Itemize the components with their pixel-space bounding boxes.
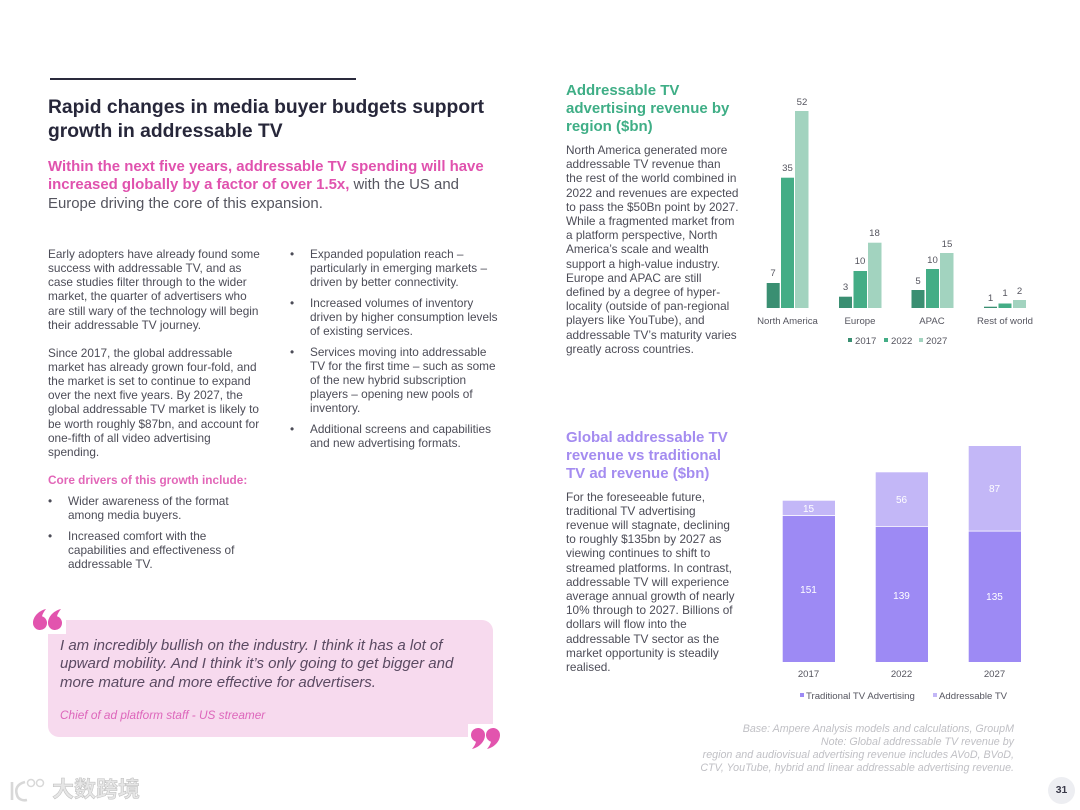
bullet list: left column: •	[48, 494, 52, 508]
stacked bar chart: addressable vs traditional	[782, 446, 1021, 702]
bullet list: right column: driven by better connectivity.	[310, 275, 459, 289]
icon: watermark mark	[10, 778, 44, 802]
bar chart: revenue by region: Rest of world	[977, 316, 1033, 327]
bullet list: left column: addressable TV.	[68, 557, 153, 571]
bullet list: right column: driven by higher consumption levels	[310, 310, 498, 324]
stacked bar chart: addressable vs traditional: 15	[803, 504, 814, 515]
text block: region commentary: support a high-value industry.	[566, 257, 720, 271]
bullet list: left column: Increased comfort with the	[68, 529, 206, 543]
title: growth in addressable TV	[48, 121, 283, 142]
text block: global commentary: streamed platforms. In contrast,	[566, 560, 732, 574]
heading: addressable TV by region: Addressable TV	[566, 82, 679, 99]
quote text: I am incredibly bullish on the industry. I think it has a lot of	[60, 637, 442, 654]
bullet list: right column: Increased volumes of inventory	[310, 296, 473, 310]
bar chart: revenue by region: 2	[1017, 286, 1022, 297]
quote text: more mature and more effective for advertisers.	[60, 674, 376, 691]
bar chart: revenue by region: 1	[1002, 288, 1008, 299]
watermark logo	[10, 777, 140, 802]
stacked bar chart: addressable vs traditional: 151	[800, 585, 817, 596]
text block: region commentary: a platform perspective, North	[566, 228, 717, 242]
bar chart: revenue by region: 7	[770, 268, 776, 279]
text block: market paragraph	[48, 346, 259, 459]
bullet list: right column: •	[290, 296, 294, 310]
bullet list: left column	[48, 494, 234, 571]
bar chart: revenue by region: 10	[927, 255, 938, 266]
text block: intro paragraph: success with addressable TV, and as	[48, 261, 241, 275]
chart legend: Addressable TV	[939, 691, 1008, 702]
bullet list: right column	[290, 246, 498, 450]
source note: region and audiovisual advertising revenue includes AVoD, BVoD,	[703, 748, 1014, 760]
bullet list: right column: inventory.	[310, 401, 360, 415]
bar chart: revenue by region: 52	[797, 97, 807, 108]
stacked bar chart: addressable vs traditional: 2022	[891, 669, 912, 680]
text block: global commentary: dollars will flow into the	[566, 617, 687, 631]
stacked bar chart: addressable vs traditional: 2027	[984, 669, 1005, 680]
bar chart: revenue by region: Europe	[845, 316, 875, 327]
text block: region commentary: While a fragmented market from	[566, 214, 734, 228]
text block: region commentary: 2022 and revenues are expected	[566, 186, 738, 200]
subtitle: Europe driving the core of this expansion.	[48, 195, 323, 212]
stacked bar chart: addressable vs traditional: 135	[986, 592, 1003, 603]
bar chart: revenue by region: 15	[942, 239, 952, 250]
text block: global commentary: addressable TV will experience	[566, 575, 729, 589]
top rule	[50, 78, 356, 80]
text block: region commentary: defined by a degree of hyper-	[566, 285, 720, 299]
heading: global addressable vs traditional	[566, 428, 728, 482]
text block: intro paragraph: are still wary of the technology will begin	[48, 304, 258, 318]
chart legend: 2017	[855, 336, 876, 347]
text block: market paragraph: global addressable TV market is likely to	[48, 402, 259, 416]
quote text: upward mobility. And I think it’s only going to get bigger and	[60, 655, 453, 672]
heading: global addressable vs traditional: revenue vs traditional	[566, 446, 721, 464]
text block: global commentary: to roughly $135bn by 2027 as	[566, 532, 721, 546]
text block: market paragraph: Since 2017, the global addressable	[48, 346, 232, 360]
text block: market paragraph: one-fifth of all video advertising	[48, 431, 211, 445]
text block: region commentary: addressable TV revenue than	[566, 157, 721, 171]
bullet list: right column: Expanded population reach –	[310, 246, 463, 260]
chart legend	[848, 336, 947, 347]
bullet list: left column: Wider awareness of the format	[68, 494, 229, 508]
bullet list: right column: particularly in emerging markets –	[310, 261, 487, 275]
text block: global commentary: For the foreseeable future,	[566, 490, 705, 504]
text block: market paragraph: over the next five years. By 2027, the	[48, 388, 243, 402]
bullet list: right column: Additional screens and capabilities	[310, 422, 491, 436]
text block: global commentary: traditional TV advertising	[566, 504, 696, 518]
text block: global commentary: revenue will stagnate, declining	[566, 518, 730, 532]
heading: addressable TV by region: region ($bn)	[566, 118, 653, 135]
stacked bar chart: addressable vs traditional: 2017	[798, 669, 819, 680]
bullet list: right column: •	[290, 246, 294, 260]
bullet list: left column: •	[48, 529, 52, 543]
text block: global commentary: viewing continues to shift to	[566, 546, 710, 560]
text block: region commentary: locality (outside of pan-regional	[566, 299, 729, 313]
heading: global addressable vs traditional: Global addressable TV	[566, 428, 728, 446]
bullet list: right column: of the new hybrid subscription	[310, 373, 466, 387]
text block: region commentary: players like YouTube), and	[566, 313, 705, 327]
quote attribution: Chief of ad platform staff - US streamer	[60, 708, 265, 722]
heading: addressable TV by region: advertising revenue by	[566, 100, 729, 117]
icon: opening quote mark	[33, 609, 66, 634]
subtitle	[48, 158, 484, 212]
text block: global commentary: addressable TV sector as the	[566, 632, 719, 646]
watermark text: 大数跨境	[52, 777, 140, 802]
text block: region commentary: greatly across countries.	[566, 342, 694, 356]
title: Rapid changes in media buyer budgets support	[48, 97, 484, 118]
text block: intro paragraph: case studies filter through to the wider	[48, 275, 247, 289]
text block: market paragraph: the market is set to continue to expand	[48, 374, 251, 388]
bar chart: revenue by region: 18	[869, 228, 880, 239]
text block: global commentary: market opportunity is steadily	[566, 646, 719, 660]
text block: market paragraph: spending.	[48, 445, 99, 459]
subtitle: Within the next five years, addressable TV spending will have	[48, 158, 484, 175]
bullet list: right column: TV for the first time – such as some	[310, 359, 496, 373]
source note: Base: Ampere Analysis models and calculations, GroupM	[743, 722, 1014, 734]
chart legend: Traditional TV Advertising	[806, 691, 915, 702]
panel: quote	[48, 620, 493, 737]
subtitle: increased globally by a factor of over 1.5x, with the US and	[48, 176, 459, 193]
bar chart: revenue by region: 10	[855, 256, 865, 267]
bar chart: revenue by region: North America	[757, 316, 819, 327]
chart legend	[800, 691, 1008, 702]
text block: region commentary: America’s scale and wealth	[566, 242, 709, 256]
text block: global commentary: average annual growth of nearly	[566, 589, 735, 603]
bullet list: left column: among media buyers.	[68, 508, 181, 522]
chart legend: 2027	[926, 336, 947, 347]
text block: intro paragraph: market, the quarter of advertisers who	[48, 289, 247, 303]
bar chart: revenue by region: 35	[782, 163, 793, 174]
bullet list: right column: of existing services.	[310, 324, 413, 338]
icon: closing quote mark	[468, 724, 500, 749]
text block: intro paragraph: their addressable TV journey.	[48, 318, 201, 332]
bar chart: revenue by region: 5	[915, 276, 921, 287]
text block: intro paragraph: Early adopters have already found some	[48, 246, 260, 260]
page number: 31	[1056, 785, 1067, 796]
text block: global commentary: 10% through to 2027. Billions of	[566, 603, 733, 617]
heading: addressable TV by region	[566, 82, 730, 135]
bar chart: revenue by region: 1	[988, 293, 993, 304]
bullet list: right column: and new advertising formats.	[310, 436, 461, 450]
heading: core drivers: Core drivers of this growth include:	[48, 472, 247, 486]
text block: region commentary: addressable TV’s maturity varies	[566, 328, 737, 342]
stacked bar chart: addressable vs traditional: 56	[896, 495, 907, 506]
chart legend: 2022	[891, 336, 912, 347]
bullet list: right column: Services moving into addressable	[310, 344, 486, 358]
bullet list: left column: capabilities and effectiveness of	[68, 543, 234, 557]
stacked bar chart: addressable vs traditional: 87	[989, 484, 1000, 495]
quote text	[60, 637, 454, 691]
text block: market paragraph: market has already grown four-fold, and	[48, 360, 257, 374]
bullet list: right column: players – opening new pools of	[310, 387, 473, 401]
heading: global addressable vs traditional: TV ad revenue ($bn)	[566, 464, 709, 482]
source note	[700, 722, 1014, 774]
bar chart: revenue by region: 3	[843, 282, 848, 293]
bullet list: right column: •	[290, 344, 294, 358]
text block: global commentary: realised.	[566, 660, 611, 674]
source note: Note: Global addressable TV revenue by	[821, 736, 1014, 748]
text block: market paragraph: be worth roughly $87bn, and account for	[48, 416, 259, 430]
text block: region commentary	[566, 143, 738, 356]
bar chart: revenue by region	[757, 97, 1033, 347]
page number	[1048, 777, 1075, 804]
bullet list: right column: •	[290, 422, 294, 436]
text block: global commentary	[566, 490, 735, 674]
text block: region commentary: the rest of the world combined in	[566, 171, 736, 185]
text block: region commentary: Europe and APAC are still	[566, 271, 702, 285]
source note: CTV, YouTube, hybrid and linear addressable advertising revenue.	[700, 762, 1014, 774]
text block: region commentary: to pass the $50Bn point by 2027.	[566, 200, 738, 214]
bar chart: revenue by region: APAC	[919, 316, 945, 327]
stacked bar chart: addressable vs traditional: 139	[893, 591, 910, 602]
text block: region commentary: North America generated more	[566, 143, 727, 157]
text block: intro paragraph	[48, 246, 260, 332]
title	[48, 97, 484, 142]
